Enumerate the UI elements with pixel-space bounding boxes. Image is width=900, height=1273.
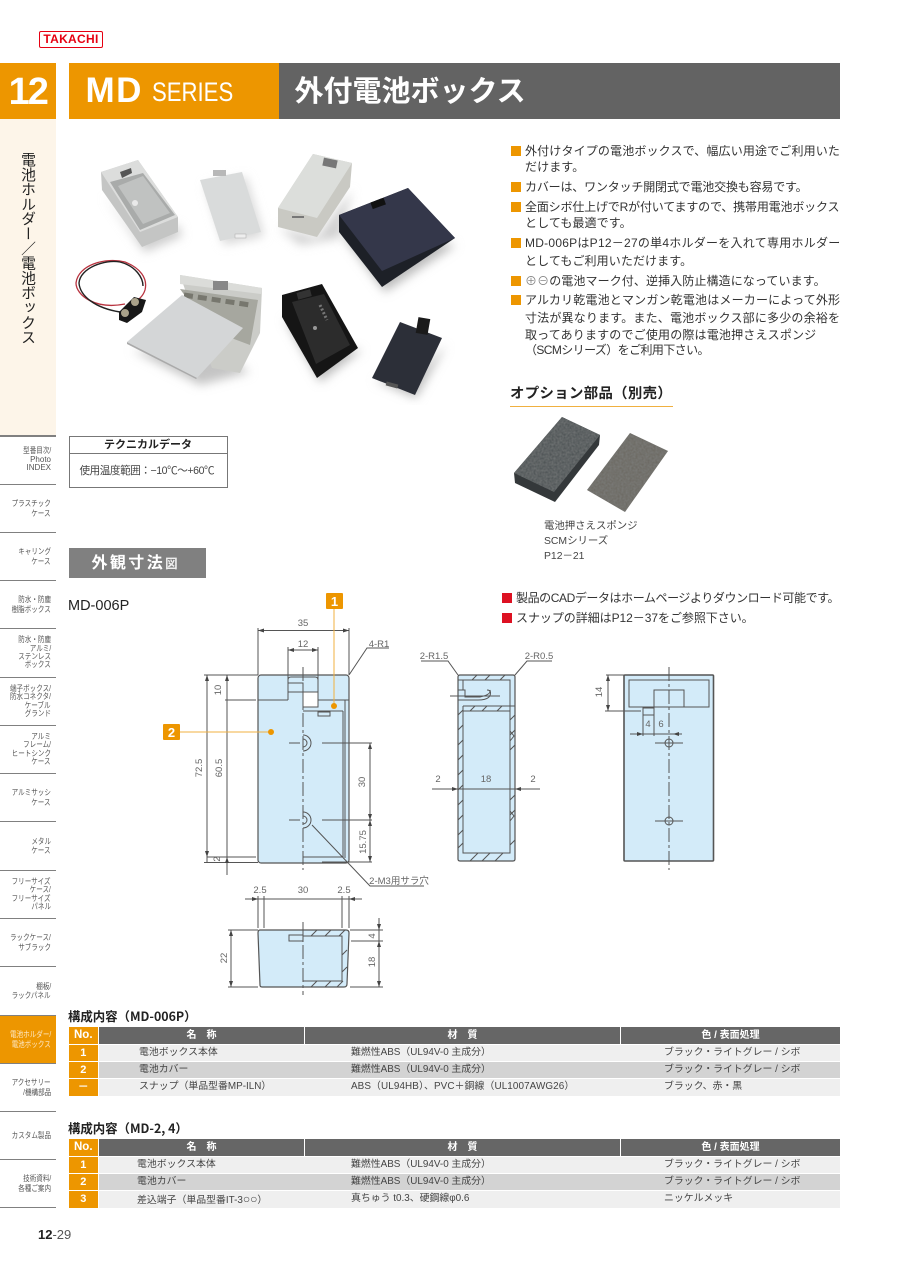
top view dimensions: 10 xyxy=(213,685,224,695)
nav: terminal boxes: グランド xyxy=(25,709,51,718)
top view dimensions: 72.5 xyxy=(194,759,205,777)
sponge photo xyxy=(514,417,668,512)
row 2 color: ブラック・ライトグレー / シボ xyxy=(664,1176,800,1187)
row 1 color: ブラック・ライトグレー / シボ xyxy=(664,1047,800,1058)
nav: index: 型番目次/ xyxy=(23,446,51,455)
header material xyxy=(305,1139,620,1156)
nav: shelves: ラックパネル xyxy=(12,991,51,1000)
table heading MD-006P: 構成内容（MD-006P） xyxy=(68,1007,197,1025)
page number: 12-29 xyxy=(38,1227,71,1242)
bullet 2 xyxy=(511,182,521,192)
nav: free-size: フリーサイズ xyxy=(12,894,51,902)
nav: terminal boxes: 端子ボックス/ xyxy=(10,684,51,693)
nav: index: Photo xyxy=(30,455,51,464)
chapter number tab xyxy=(0,63,56,118)
top view dimensions: 15.75 xyxy=(358,830,369,854)
top view dimensions: 60.5 xyxy=(214,759,225,777)
section view dimensions: 18 xyxy=(481,774,491,785)
text 4 line 2: としてもご利用いただけます。 xyxy=(525,254,692,268)
row 2 no: 2 xyxy=(80,1064,86,1076)
row 1 xyxy=(99,1045,840,1061)
nav: terminal boxes: 防水コネクタ/ xyxy=(10,692,51,701)
closed black box xyxy=(339,188,456,292)
header name xyxy=(99,1139,304,1156)
header color: 色 / 表面処理 xyxy=(701,1142,760,1153)
nav: rack cases: ラックケース/ xyxy=(10,933,51,942)
end view dimensions: 22 xyxy=(219,953,230,963)
nav: rack cases: サブラック xyxy=(18,942,51,952)
sponge block xyxy=(514,417,600,502)
header No: No. xyxy=(74,1141,93,1153)
cover view dimensions xyxy=(594,687,664,730)
cover view dimensions: 14 xyxy=(594,687,605,697)
header No xyxy=(68,1139,98,1156)
row 3 no: 3 xyxy=(80,1193,86,1205)
text 5: ⊕⊖の電池マーク付、逆挿入防止構造になっています。 xyxy=(525,274,826,288)
nav: metal cases: ケース xyxy=(32,846,51,855)
chapter number tab: 12 xyxy=(9,71,47,113)
end view dimensions: 30 xyxy=(298,885,308,896)
red bullet 1 xyxy=(502,593,512,603)
row 1 name: 電池ボックス本体 xyxy=(137,1159,216,1170)
section view dimensions: 2 xyxy=(435,774,441,785)
nav: accessories xyxy=(0,1064,56,1112)
row 3 material: ABS（UL94HB）、PVC＋銅線（UL1007AWG26） xyxy=(351,1081,574,1092)
nav top rule xyxy=(0,435,56,436)
bullet 5 xyxy=(511,276,521,286)
parts table MD-006P xyxy=(69,1027,840,1096)
drawing: top view xyxy=(204,628,424,886)
header color xyxy=(621,1027,840,1044)
top view dimensions: 2 xyxy=(212,856,223,862)
open grey box xyxy=(101,160,182,252)
title banner xyxy=(278,63,840,118)
sponge caption xyxy=(544,520,638,562)
callout 2 xyxy=(163,724,274,740)
black lid xyxy=(372,317,446,398)
nav: technical data xyxy=(0,1160,56,1208)
nav: custom products xyxy=(0,1112,56,1160)
cover view dimensions: 6 xyxy=(658,719,664,730)
series code MD: MD xyxy=(86,71,143,110)
row 1 no: 1 xyxy=(80,1159,86,1171)
nav: terminal boxes: ケーブル xyxy=(25,700,51,710)
dimension drawing heading: 外観寸法図 xyxy=(92,554,180,572)
row 2 material: 難燃性ABS（UL94V-0 主成分） xyxy=(351,1064,491,1075)
row 3 color: ニッケルメッキ xyxy=(664,1193,733,1204)
nav: free-size: フリーサイズ xyxy=(12,877,51,886)
nav: carrying cases: キャリング xyxy=(18,547,51,556)
row 2 name: 電池カバー xyxy=(137,1176,186,1187)
dimension arrowheads xyxy=(205,628,679,987)
row 2 material: 難燃性ABS（UL94V-0 主成分） xyxy=(351,1176,491,1187)
technical data box xyxy=(68,436,228,488)
nav: active battery holders: 電池ボックス xyxy=(12,1040,51,1048)
row 3 no: － xyxy=(78,1081,89,1093)
row 1 name: 電池ボックス本体 xyxy=(139,1047,218,1058)
row 3 no xyxy=(68,1191,98,1208)
nav: index xyxy=(0,436,56,485)
series word: SERIES xyxy=(152,77,233,107)
end view dimensions: 2.5 xyxy=(337,885,351,896)
header name xyxy=(99,1027,304,1044)
parts table MD-2,4 xyxy=(69,1139,840,1208)
header color: 色 / 表面処理 xyxy=(701,1030,760,1041)
header name: 名 称 xyxy=(186,1030,216,1041)
sponge caption: SCMシリーズ xyxy=(544,536,608,547)
sponge caption: P12－21 xyxy=(544,551,584,562)
nav: accessories: /機構部品 xyxy=(23,1088,51,1096)
text 3: 全面シボ仕上げでRが付いてますので、携帯用電池ボックス xyxy=(525,200,839,214)
end view dimensions: 18 xyxy=(367,957,378,967)
nav: carrying cases xyxy=(0,533,56,581)
row 1 material: 難燃性ABS（UL94V-0 主成分） xyxy=(351,1047,491,1058)
top view dimensions: 2-M3用サラ穴 xyxy=(369,876,429,887)
text 1: 外付けタイプの電池ボックスで、幅広い用途でご利用いた xyxy=(525,144,840,158)
nav: aluminium sash: アルミサッシ xyxy=(12,788,51,797)
red bullet 2 xyxy=(502,613,512,623)
nav: aluminium sash: ケース xyxy=(32,798,51,806)
section view dimensions: 2 xyxy=(530,774,536,785)
top view dimensions xyxy=(194,618,429,887)
cover view dimensions: 4 xyxy=(645,719,651,730)
CAD text: 製品のCADデータはホームページよりダウンロード可能です。 xyxy=(516,591,839,605)
header material xyxy=(305,1027,620,1044)
sidebar vertical label: 電池ホルダー／電池ボックス xyxy=(18,152,39,344)
nav: active battery holders xyxy=(0,1016,56,1064)
row 3 color: ブラック、赤・黒 xyxy=(664,1081,742,1092)
top view dimensions: 35 xyxy=(298,618,308,629)
dimension drawing heading xyxy=(68,548,206,578)
section view dimensions: 2-R0.5 xyxy=(525,651,553,662)
top view dimensions: 12 xyxy=(298,639,308,650)
battery snap with wires xyxy=(76,261,146,323)
row 3 no xyxy=(68,1079,98,1096)
row 3 material: 真ちゅう t0.3、硬鋼線φ0.6 xyxy=(351,1193,469,1204)
row 1 no: 1 xyxy=(80,1047,86,1059)
row 2 xyxy=(99,1174,840,1190)
drawing: end view xyxy=(228,896,383,995)
options heading: オプション部品（別売） xyxy=(510,382,672,403)
header name: 名 称 xyxy=(186,1142,216,1153)
nav: technical data: 各種ご案内 xyxy=(18,1184,51,1192)
nav: accessories: アクセサリー xyxy=(12,1078,51,1087)
sidebar navigation xyxy=(0,435,56,1208)
nav: waterproof resin boxes xyxy=(0,581,56,629)
section view dimensions: 2-R1.5 xyxy=(420,651,448,662)
row 3 name: スナップ（単品型番MP-ILN） xyxy=(139,1081,271,1092)
nav: free-size: ケース/ xyxy=(30,885,51,894)
row 2 no xyxy=(68,1174,98,1190)
nav: aluminium frame xyxy=(0,726,56,774)
row 3 name: 差込端子（単品型番IT-3○○） xyxy=(137,1192,267,1206)
nav: aluminium frame: フレーム/ xyxy=(23,740,51,749)
row 2 no: 2 xyxy=(80,1176,86,1188)
row 1 no xyxy=(68,1157,98,1173)
text 2: カバーは、ワンタッチ開閉式で電池交換も容易です。 xyxy=(525,180,807,194)
sidebar chapter panel xyxy=(0,118,56,434)
nav: aluminium frame: ケース xyxy=(32,757,51,766)
sponge caption: 電池押さえスポンジ xyxy=(544,521,638,532)
header material: 材 質 xyxy=(448,1142,478,1153)
end view dimensions: 4 xyxy=(367,933,378,939)
end view dimensions xyxy=(219,885,378,967)
series banner xyxy=(68,63,278,118)
bullet 1 xyxy=(511,146,521,156)
nav: plastic cases: ケース xyxy=(32,508,51,518)
nav: free-size: パネル xyxy=(31,902,51,911)
product photo xyxy=(75,154,456,402)
nav: waterproof resin boxes: 防水・防塵 xyxy=(18,595,51,604)
row 2 xyxy=(99,1062,840,1078)
text 6 line 2: 寸法が異なります。また、電池ボックス部に多少の余裕を xyxy=(525,311,840,325)
sponge sheet xyxy=(587,433,668,512)
closed grey box xyxy=(278,154,352,245)
technical data heading xyxy=(70,437,226,454)
nav: terminal boxes xyxy=(0,678,56,726)
drawing: cover view xyxy=(605,667,714,870)
text 1 line 2: だけます。 xyxy=(525,160,584,174)
nav: waterproof resin boxes: 樹脂ボックス xyxy=(12,604,51,614)
top view dimensions: 30 xyxy=(357,777,368,787)
nav: free-size xyxy=(0,871,56,919)
row 3 xyxy=(99,1079,840,1096)
nav: technical data: 技術資料/ xyxy=(23,1174,51,1183)
nav: plastic cases xyxy=(0,485,56,533)
header material: 材 質 xyxy=(448,1030,478,1041)
temperature range: 使用温度範囲：−10℃〜+60℃ xyxy=(80,465,214,477)
nav: plastic cases: プラスチック xyxy=(12,499,51,508)
section view dimensions xyxy=(420,651,553,785)
nav: carrying cases: ケース xyxy=(32,556,51,566)
text 6 line 4: （SCMシリーズ）をご利用下さい。 xyxy=(525,343,709,357)
nav: shelves xyxy=(0,967,56,1016)
row 1 xyxy=(99,1157,840,1173)
nav: rack cases xyxy=(0,919,56,967)
dimension drawings xyxy=(163,593,714,995)
row 1 color: ブラック・ライトグレー / シボ xyxy=(664,1159,800,1170)
nav: index: INDEX xyxy=(27,463,51,472)
snap text: スナップの詳細はP12－37をご参照下さい。 xyxy=(516,611,754,625)
nav: custom products: カスタム製品 xyxy=(12,1131,51,1140)
nav: waterproof aluminium boxes: ボックス xyxy=(25,660,51,669)
header No: No. xyxy=(74,1029,93,1041)
row 2 color: ブラック・ライトグレー / シボ xyxy=(664,1064,800,1075)
open black box xyxy=(282,284,362,382)
callout 1: 1 xyxy=(331,594,338,609)
callout 2: 2 xyxy=(168,725,175,740)
row 3 xyxy=(99,1191,840,1208)
text 6 line 3: 取ってありますのでご使用の際は電池押さえスポンジ xyxy=(525,328,816,342)
drawing: section view xyxy=(421,661,552,861)
end view dimensions: 2.5 xyxy=(253,885,267,896)
row 1 material: 難燃性ABS（UL94V-0 主成分） xyxy=(351,1159,491,1170)
row 2 no xyxy=(68,1062,98,1078)
title banner: 外付電池ボックス xyxy=(294,68,526,110)
nav: aluminium frame: ヒートシンク xyxy=(12,748,51,758)
nav: waterproof aluminium boxes: アルミ/ xyxy=(30,644,51,653)
grey box with open cover xyxy=(127,275,262,385)
bullet 6 xyxy=(511,295,521,305)
top view dimensions: 4-R1 xyxy=(369,639,389,650)
technical data heading: テクニカルデータ xyxy=(104,439,192,451)
header color xyxy=(621,1139,840,1156)
row 1 no xyxy=(68,1045,98,1061)
nav: aluminium sash xyxy=(0,774,56,822)
nav: shelves: 棚板/ xyxy=(36,982,51,990)
nav: aluminium frame: アルミ xyxy=(31,732,51,741)
callout 1 xyxy=(326,593,343,709)
CAD note xyxy=(502,591,839,625)
nav: waterproof aluminium boxes xyxy=(0,629,56,678)
row 2 name: 電池カバー xyxy=(139,1064,188,1075)
grey lid xyxy=(200,170,264,245)
nav: metal cases xyxy=(0,822,56,871)
bullet 3 xyxy=(511,202,521,212)
bullet 4 xyxy=(511,238,521,248)
logo: TAKACHI: TAKACHI xyxy=(43,32,99,46)
nav: active battery holders: 電池ホルダー/ xyxy=(10,1030,51,1039)
text 3 line 2: としても最適です。 xyxy=(525,216,632,230)
feature bullets xyxy=(511,144,840,357)
nav: metal cases: メタル xyxy=(31,836,51,846)
text 6: アルカリ乾電池とマンガン乾電池はメーカーによって外形 xyxy=(525,293,840,307)
nav: waterproof aluminium boxes: ステンレス xyxy=(18,652,51,661)
header No xyxy=(68,1027,98,1044)
table heading MD-2,4: 構成内容（MD-2, 4） xyxy=(68,1119,188,1137)
model name: MD-006P xyxy=(68,598,129,614)
nav: waterproof aluminium boxes: 防水・防塵 xyxy=(18,635,51,644)
text 4: MD-006PはP12－27の単4ホルダーを入れて専用ホルダー xyxy=(525,236,840,250)
